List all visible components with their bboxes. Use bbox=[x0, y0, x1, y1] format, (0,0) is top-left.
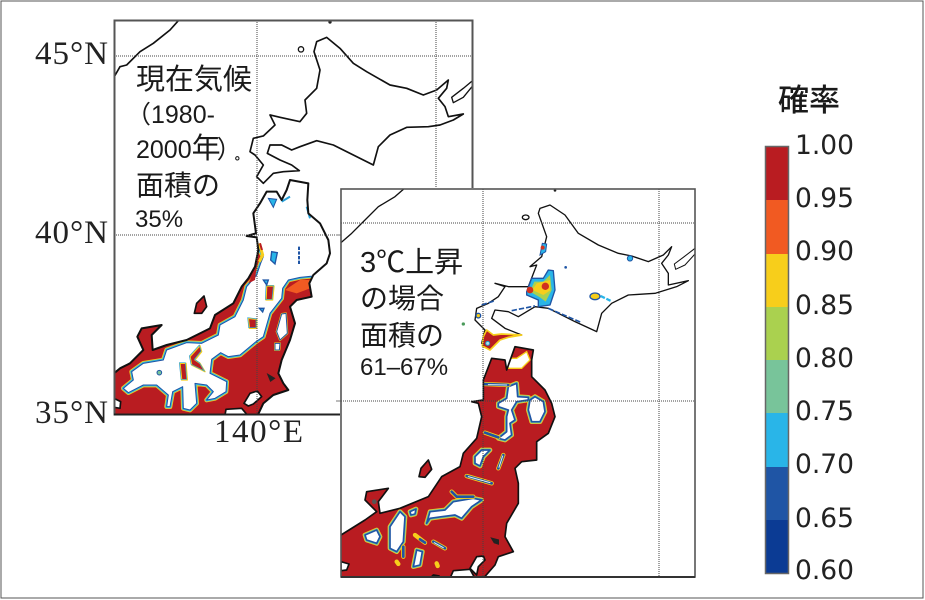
map 1 Hokkaido outline bbox=[115, 20, 473, 183]
orange band near Sendai bbox=[285, 280, 310, 293]
annotation: 3 degree rise: 3℃上昇 bbox=[360, 247, 463, 279]
map 2 Sado Island bbox=[419, 460, 432, 477]
map 2 central Hokkaido probability patch bbox=[527, 270, 555, 307]
map 2 southern coast bbox=[341, 538, 498, 578]
annotation: present climate: 2000年） bbox=[136, 132, 242, 165]
map 1 land and probability field bbox=[100, 20, 473, 420]
colour bar tick labels: 0.60 bbox=[795, 555, 854, 586]
colour bar tick labels bbox=[795, 130, 854, 586]
colour bar tick labels: 0.85 bbox=[795, 290, 854, 321]
map 2 Hokkaido bbox=[341, 189, 695, 350]
map 2 bottom axis line bbox=[341, 576, 695, 578]
legend title: 確率 bbox=[778, 83, 840, 118]
annotation: present climate: （1980- bbox=[126, 101, 215, 129]
annotation: present climate: 面積の bbox=[136, 170, 220, 201]
map 2 Noto inlet bbox=[372, 499, 377, 504]
map 2 frame bbox=[341, 189, 695, 577]
colour bar tick labels: 0.70 bbox=[795, 449, 854, 480]
map 1 frame bbox=[114, 20, 472, 414]
colour bar tick labels: 0.95 bbox=[795, 183, 854, 214]
latitude label 40N: 40°N bbox=[35, 215, 108, 251]
colour bar tick labels: 0.65 bbox=[795, 503, 854, 534]
map 2 northwest spot bbox=[540, 243, 547, 255]
map 2 panel background bbox=[340, 188, 695, 577]
colour bar tick labels: 0.75 bbox=[795, 396, 854, 427]
map 2 Honshu bbox=[342, 346, 556, 576]
annotation: present climate: 35% bbox=[135, 206, 183, 233]
white holes in Aomori bbox=[506, 352, 530, 368]
map 1 bottom axis line bbox=[114, 414, 341, 416]
map 2 grid lines bbox=[341, 189, 695, 577]
annotation: 3 degree rise: の場合 bbox=[360, 283, 444, 314]
longitude label 140E: 140°E bbox=[214, 414, 303, 450]
map 1 grid lines bbox=[114, 20, 473, 415]
annotation: present climate: 現在気候 bbox=[136, 63, 252, 96]
map 2 land and probability field bbox=[335, 189, 695, 583]
annotation: present climate bbox=[126, 63, 252, 233]
colour bar tick labels: 1.00 bbox=[795, 130, 854, 161]
map 2 Oshima peninsula patch bbox=[462, 301, 582, 350]
latitude label 45N: 45°N bbox=[35, 36, 108, 72]
map 2 axis ticks bbox=[336, 235, 341, 401]
colour bar bbox=[766, 146, 788, 574]
colour bar tick labels: 0.90 bbox=[795, 236, 854, 267]
map 1 southern coast bbox=[114, 375, 274, 415]
annotation: 3 degree rise: 面積の bbox=[360, 320, 444, 351]
map: 3 degree warming bbox=[335, 188, 695, 583]
latitude label 35N: 35°N bbox=[35, 395, 108, 431]
map 1 Sado Island bbox=[194, 296, 207, 313]
legend: probability colour scale bbox=[766, 83, 854, 586]
map 2 Tokyo Bay bbox=[470, 556, 485, 575]
map 1 Tokyo Bay bbox=[244, 391, 262, 406]
map 1 Honshu bbox=[116, 179, 331, 414]
map: present climate bbox=[35, 20, 473, 450]
thin high-mountain ridges bbox=[397, 384, 508, 566]
annotation: 3 degree rise: 61–67% bbox=[360, 354, 448, 381]
colour bar tick labels: 0.80 bbox=[795, 343, 854, 374]
annotation: 3 degree rise bbox=[360, 247, 463, 381]
map 2 eastern spots bbox=[564, 256, 633, 301]
